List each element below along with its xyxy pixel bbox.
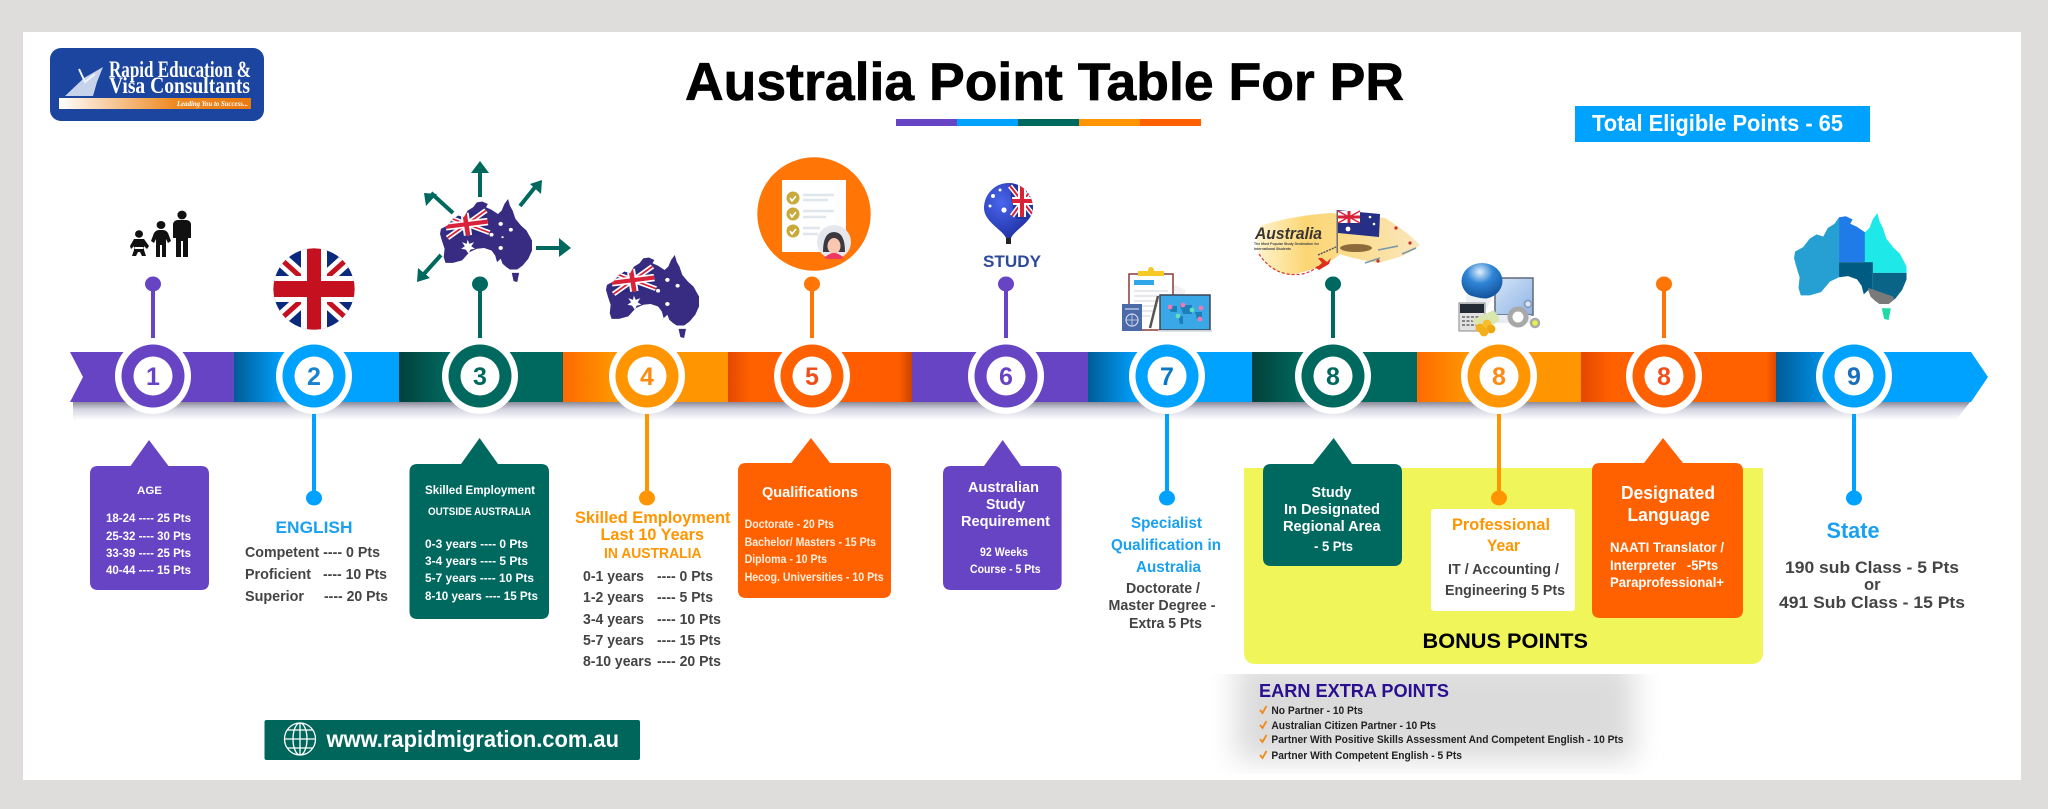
text block: specialist qualification: Doctorate /: [1126, 581, 1200, 597]
card: designated language: -5Pts: [1687, 557, 1718, 573]
card: age: [90, 440, 209, 590]
text block: specialist qualification: [1108, 515, 1221, 632]
card: professional year: IT / Accounting /: [1448, 561, 1560, 578]
text block: skilled employment in Australia: Last 10 Years: [600, 525, 704, 544]
total eligible points badge: [1575, 106, 1870, 142]
text block: specialist qualification: Qualification in: [1111, 537, 1221, 554]
node 1: [115, 276, 191, 414]
card: study in regional area: [1263, 438, 1402, 566]
card: skilled employment outside Australia: OUTSIDE AUSTRALIA: [428, 506, 531, 518]
node 3: [442, 276, 518, 414]
text block: skilled employment in Australia: ---- 10 Pts: [657, 612, 721, 628]
text block: specialist qualification: Master Degree -: [1108, 598, 1216, 614]
text block: English: Superior: [245, 588, 304, 605]
node 8 regional study: 8: [1326, 363, 1340, 391]
icon: Australia study map: International Students: [1254, 247, 1291, 251]
card: skilled employment outside Australia: 0-3 years ---- 0 Pts: [425, 537, 528, 551]
node 6: 6: [999, 363, 1013, 391]
node 8 professional year: [1461, 338, 1537, 506]
timeline ribbon: [70, 352, 1988, 420]
card: skilled employment outside Australia: 3-4 years ---- 5 Pts: [425, 554, 528, 568]
card: qualifications: Doctorate - 20 Pts: [745, 517, 834, 531]
icon: Australia map with outward arrows: [417, 161, 571, 282]
icon: UK flag: [273, 248, 355, 330]
panel: earn extra points: Partner With Positive Skills Assessment And Competent English - 10 Pts: [1271, 734, 1624, 746]
card: designated language: Interpreter: [1610, 557, 1677, 573]
card: study in regional area: In Designated: [1284, 501, 1380, 518]
logo: Visa Consultants: [109, 73, 250, 98]
website bar: www.rapidmigration.com.au: [326, 726, 619, 752]
card: Australian study requirement: Australian: [968, 479, 1039, 496]
text block: state: 491 Sub Class - 15 Pts: [1779, 594, 1965, 612]
card: designated language: Language: [1628, 505, 1710, 525]
card: age: 33-39 ---- 25 Pts: [106, 546, 191, 560]
card: professional year: Professional: [1452, 515, 1550, 534]
icon: qualifications document: [757, 157, 871, 271]
text block: skilled employment in Australia: 3-4 years: [583, 612, 644, 628]
text block: skilled employment in Australia: ---- 0 Pts: [657, 569, 713, 585]
text block: skilled employment in Australia: IN AUSTRALIA: [604, 545, 702, 562]
icon: Australia study map: Australia: [1254, 224, 1322, 243]
heading: bonus points: BONUS POINTS: [1422, 630, 1588, 653]
icon: visa clipboard, passport and map: [1122, 267, 1212, 332]
card: professional year: [1431, 509, 1575, 611]
card: Australian study requirement: [943, 440, 1062, 590]
node 8 designated language: 8: [1657, 363, 1671, 391]
text block: skilled employment in Australia: ---- 15 Pts: [657, 633, 721, 649]
card: study in regional area: - 5 Pts: [1314, 538, 1353, 554]
card: age: 18-24 ---- 25 Pts: [106, 511, 191, 525]
title: Australia Point Table For PR: [685, 53, 1404, 112]
card: designated language: Paraprofessional+: [1610, 574, 1724, 590]
node 5: 5: [805, 363, 819, 391]
node 2: [276, 338, 352, 506]
text block: skilled employment in Australia: 0-1 years: [583, 569, 644, 585]
node 8 regional study: [1295, 276, 1371, 414]
icon: flag map: [440, 199, 532, 282]
card: qualifications: Hecog. Universities - 10 Pts: [745, 570, 884, 584]
node 7: [1129, 338, 1205, 506]
website bar: [264, 720, 640, 760]
node 5: [774, 276, 850, 414]
text block: English: ENGLISH: [276, 518, 352, 537]
icon: globe: [284, 723, 316, 755]
text block: English: [245, 518, 388, 605]
icon: Australia study map: [1254, 210, 1420, 275]
card: age: 25-32 ---- 30 Pts: [106, 529, 191, 543]
node 4: [609, 338, 685, 506]
text block: skilled employment in Australia: [575, 508, 731, 670]
panel: earn extra points: EARN EXTRA POINTS: [1259, 681, 1449, 701]
card: Australian study requirement: Study: [986, 496, 1026, 513]
text block: specialist qualification: Specialist: [1131, 515, 1203, 532]
total eligible points badge: Total Eligible Points - 65: [1592, 110, 1843, 136]
node 4: 4: [640, 363, 654, 391]
panel: bonus points: [1244, 438, 1763, 664]
card: professional year: Year: [1487, 536, 1520, 555]
node 9: 9: [1847, 363, 1861, 391]
icon: study balloon: [983, 183, 1042, 271]
card: qualifications: Diploma - 10 Pts: [745, 552, 827, 566]
card: qualifications: [738, 438, 891, 598]
icon: Australia states map: [1794, 213, 1910, 320]
arrows: outward: [417, 161, 571, 282]
text block: skilled employment in Australia: Skilled Employment: [575, 508, 731, 527]
card: study in regional area: Study: [1312, 484, 1352, 501]
card: professional year: Engineering 5 Pts: [1445, 582, 1565, 599]
card: qualifications: Qualifications: [762, 484, 858, 501]
card: designated language: [1592, 438, 1743, 618]
node 3: 3: [473, 363, 487, 391]
text block: state: or: [1864, 576, 1881, 594]
card: skilled employment outside Australia: 5-7 years ---- 10 Pts: [425, 571, 534, 585]
node 6: [968, 276, 1044, 414]
text block: state: [1779, 518, 1965, 612]
text block: specialist qualification: Australia: [1136, 559, 1201, 576]
card: skilled employment outside Australia: [410, 438, 549, 619]
logo: Leading You to Success...: [176, 100, 248, 108]
logo: Rapid Education &: [109, 57, 251, 82]
card: skilled employment outside Australia: 8-10 years ---- 15 Pts: [425, 589, 538, 603]
node 2: 2: [307, 363, 321, 391]
card: designated language: NAATI Translator /: [1610, 539, 1724, 555]
card: skilled employment outside Australia: Skilled Employment: [425, 483, 535, 497]
icon: computer, calculator and gears: [1459, 263, 1539, 336]
panel: earn extra points: No Partner - 10 Pts: [1271, 705, 1363, 717]
panel: earn extra points: Australian Citizen Partner - 10 Pts: [1271, 720, 1436, 732]
card: study in regional area: Regional Area: [1283, 518, 1381, 535]
node 1: 1: [146, 363, 160, 391]
icon: family: [130, 211, 191, 257]
card: age: 40-44 ---- 15 Pts: [106, 563, 191, 577]
icon: Australia study map: The Most Popular Study Destination for: [1254, 242, 1319, 246]
text block: English: ---- 20 Pts: [324, 588, 388, 605]
title underline: [896, 119, 1201, 126]
text block: English: ---- 10 Pts: [323, 566, 387, 583]
text block: skilled employment in Australia: 5-7 years: [583, 633, 644, 649]
text block: English: Competent ---- 0 Pts: [245, 544, 380, 561]
text block: specialist qualification: Extra 5 Pts: [1129, 616, 1202, 632]
panel: earn extra points: Partner With Competent English - 5 Pts: [1271, 750, 1462, 762]
panel: earn extra points: [1236, 660, 1634, 762]
node 8 professional year: 8: [1492, 363, 1506, 391]
node 9: [1816, 338, 1892, 506]
card: Australian study requirement: Course - 5 Pts: [970, 562, 1041, 576]
text block: state: 190 sub Class - 5 Pts: [1785, 559, 1959, 577]
card: designated language: Designated: [1621, 483, 1715, 503]
icon: study balloon: STUDY: [983, 252, 1042, 271]
card: qualifications: Bachelor/ Masters - 15 Pts: [745, 535, 876, 549]
text block: English: Proficient: [245, 566, 311, 583]
text block: skilled employment in Australia: 8-10 years: [583, 654, 652, 670]
node 8 designated language: [1626, 276, 1702, 414]
text block: skilled employment in Australia: 1-2 years: [583, 590, 644, 606]
card: age: AGE: [137, 485, 162, 497]
card: Australian study requirement: 92 Weeks: [980, 545, 1028, 559]
text block: skilled employment in Australia: ---- 5 Pts: [657, 590, 713, 606]
text block: skilled employment in Australia: ---- 20 Pts: [657, 654, 721, 670]
icon: Australia flag map: [606, 255, 699, 338]
node 7: 7: [1160, 363, 1174, 391]
logo: [50, 48, 264, 121]
card: Australian study requirement: Requirement: [961, 513, 1050, 530]
text block: state: State: [1826, 518, 1880, 543]
